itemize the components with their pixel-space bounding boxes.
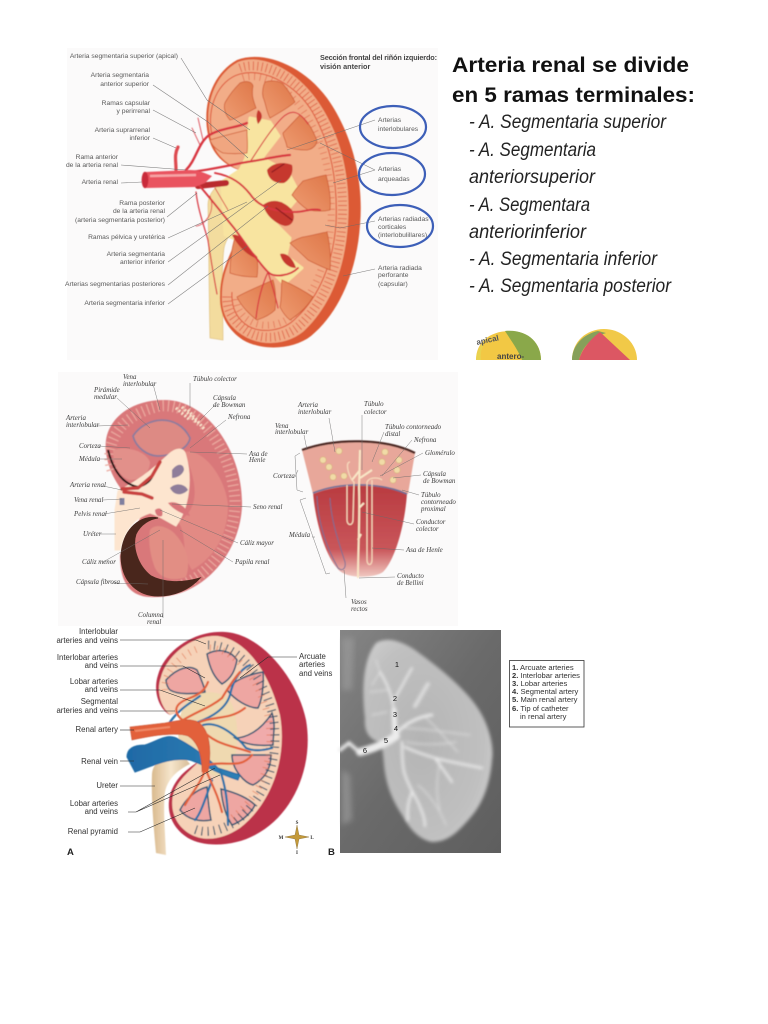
icon: compass rose <box>279 821 314 856</box>
labels: nephron wedge: Túbulo <box>421 492 441 499</box>
icon: compass rose: S <box>296 821 299 826</box>
labels: kidney section: Nefrona <box>227 414 251 421</box>
labels: right callouts: Arteria radiada <box>378 265 422 272</box>
panel: frontal section of left kidney, segmental arteries <box>65 48 438 360</box>
renal sinus and pelvis <box>115 449 189 550</box>
capsule band <box>302 441 415 453</box>
labels: and veins <box>85 685 118 694</box>
labels: kidney section: Asa de <box>248 451 268 458</box>
artery lumen <box>142 172 148 188</box>
labels: left callouts: de la arteria renal <box>66 162 119 169</box>
labels: nephron wedge: colector <box>416 526 439 533</box>
icon: compass rose: I <box>296 851 298 856</box>
labels: Ureter <box>96 781 118 790</box>
x-ray background <box>340 630 501 853</box>
labels: Lobar arteries <box>70 799 118 808</box>
labels: nephron wedge: Túbulo <box>364 401 384 408</box>
leader lines <box>96 383 423 618</box>
labels: left callouts: anterior superior <box>100 81 150 88</box>
vessel numbers: 3 <box>393 710 397 719</box>
renal pyramids <box>210 81 330 320</box>
icon: compass rose: L <box>310 836 314 841</box>
vessel numbers: 1 <box>395 660 399 669</box>
labels: nephron wedge: proximal <box>420 506 446 513</box>
labels: kidney section: Túbulo colector <box>193 376 237 383</box>
heading: en 5 ramas terminales: <box>452 84 695 107</box>
vessel numbers: 2 <box>393 694 397 703</box>
vessel numbers <box>363 660 399 755</box>
collecting duct <box>352 450 372 578</box>
labels: kidney section: Seno renal <box>253 504 282 511</box>
labels: kidney section: Corteza <box>79 443 101 450</box>
radial interlobular vessels <box>227 66 343 337</box>
labels: kidney section: Médula <box>78 456 101 463</box>
legend box <box>510 660 584 727</box>
renal vessels <box>122 462 160 498</box>
labels: kidney section: Vena renal <box>74 497 103 504</box>
labels: nephron wedge: Nefrona <box>413 437 437 444</box>
labels <box>56 627 332 836</box>
artery highlight <box>150 175 196 176</box>
labels: kidney section: Vena <box>123 374 137 381</box>
labels: and veins <box>85 807 118 816</box>
labels: nephron wedge: Cápsula <box>423 471 447 478</box>
section heading: Sección frontal del riñón izquierdo: <box>320 53 437 62</box>
cortical arteries <box>165 648 270 818</box>
bottom medulla <box>149 526 188 579</box>
labels: arteries and veins <box>56 636 118 645</box>
section heading <box>320 53 437 71</box>
labels: nephron wedge: rectos <box>351 606 368 613</box>
renal sinus <box>178 692 237 776</box>
labels: kidney section: Arteria <box>65 415 86 422</box>
labels: and veins <box>85 661 118 670</box>
panel: labeled kidney vasculature (A) <box>56 627 335 858</box>
labels: kidney section: Cáliz mayor <box>240 540 274 547</box>
labels: Interlobular <box>79 627 118 636</box>
capsule <box>206 57 361 347</box>
labels: nephron wedge: Conductor <box>416 519 446 526</box>
legend text: 1. Arcuate arteries <box>512 663 574 672</box>
spine shadow <box>342 638 354 825</box>
legend text: 2. Interlobar arteries <box>512 671 580 680</box>
panel: kidney section with nephron detail <box>58 372 458 626</box>
vein branches <box>170 665 272 825</box>
legend text: 4. Segmental artery <box>512 687 578 696</box>
labels: nephron wedge: Vena <box>275 423 289 430</box>
labels: left callouts: y perirrenal <box>117 108 151 115</box>
labels: right callouts: corticales <box>378 224 407 231</box>
labels: left callouts: inferior <box>130 135 151 142</box>
cortex <box>159 636 282 839</box>
labels: nephron wedge: Arteria <box>297 402 318 409</box>
branch list <box>469 112 672 297</box>
labels: arteries <box>299 660 325 669</box>
labels: kidney section: Cáliz menor <box>82 559 116 566</box>
glomeruli <box>320 448 402 483</box>
labels: nephron wedge: de Bowman <box>423 478 456 485</box>
labels: Segmental <box>81 697 118 706</box>
ball label: antero- <box>497 352 524 361</box>
cortical columns <box>110 406 235 590</box>
kidney cross section <box>106 400 242 597</box>
labels: nephron wedge: Vasos <box>351 599 367 606</box>
labels: left callouts: Rama posterior <box>119 200 166 207</box>
upper medulla lobe <box>133 420 190 456</box>
labels: left callouts: anterior inferior <box>120 259 166 266</box>
branch list: anteriorsuperior <box>469 167 596 188</box>
labels: Renal pyramid <box>68 827 118 836</box>
labels: right callouts: (interlobulillares) <box>378 232 427 239</box>
labels: Lobar arteries <box>70 677 118 686</box>
labels: kidney section: Pelvis renal <box>73 511 107 518</box>
renal vein <box>127 737 240 780</box>
artery branches <box>176 672 252 812</box>
branch list: - A. Segmentaria <box>469 140 596 161</box>
labels: nephron wedge: Glomérulo <box>425 450 455 457</box>
medulla <box>313 485 407 577</box>
kidney illustration <box>127 632 308 855</box>
panel background <box>58 372 458 626</box>
segment ball: anterior view <box>476 331 541 361</box>
cortex <box>302 441 415 494</box>
labels: left callouts: Rama anterior <box>76 154 119 161</box>
leader lines <box>120 640 297 832</box>
collecting tubule dots <box>176 407 205 430</box>
minor calyces <box>232 110 296 268</box>
renal pyramids <box>166 651 274 825</box>
labels: left callouts: Arteria segmentaria inferior <box>84 300 166 307</box>
main renal artery <box>146 170 212 188</box>
labels: nephron wedge: Conducto <box>397 573 424 580</box>
labels: left callouts: Arteria suprarrenal <box>95 127 151 134</box>
ureter <box>208 182 238 340</box>
renal calyces in sinus <box>170 465 188 494</box>
kidney illustration <box>142 57 361 347</box>
right medulla <box>178 452 228 570</box>
vessel numbers: 4 <box>394 724 398 733</box>
labels: right callouts <box>378 117 429 288</box>
legend text: in renal artery <box>520 712 567 721</box>
labels: kidney section: Pirámide <box>93 387 120 394</box>
section heading: visión anterior <box>320 62 370 71</box>
fibrous capsule crescent <box>121 517 200 596</box>
legend: angiogram key <box>510 660 584 727</box>
leader lines <box>121 58 375 304</box>
labels: kidney section: de Bowman <box>213 402 246 409</box>
legend text <box>512 663 580 721</box>
labels: kidney section: Columna <box>138 612 164 619</box>
labels: right callouts: perforante <box>378 272 409 279</box>
branch list: - A. Segmentara <box>469 195 590 216</box>
labels: right callouts: Arterias radiadas <box>378 216 429 223</box>
vasa recta <box>317 496 345 570</box>
branch list: - A. Segmentaria posterior <box>469 276 672 297</box>
kidney silhouette <box>363 640 493 842</box>
segment ball: posterior view <box>572 329 637 360</box>
figure letter A: A <box>67 847 74 858</box>
labels: right callouts: Arterias <box>378 166 402 173</box>
labels: left callouts <box>65 53 178 307</box>
ball label: apical <box>476 333 500 347</box>
labels: arteries and veins <box>56 706 118 715</box>
labels: left callouts: de la arteria renal <box>113 208 166 215</box>
labels: right callouts: (capsular) <box>378 281 408 288</box>
renal artery tree <box>340 660 482 826</box>
branch list: anteriorinferior <box>469 222 587 243</box>
labels: Renal vein <box>81 757 118 766</box>
renal artery and branches <box>176 112 320 318</box>
labels: nephron wedge: Corteza <box>273 473 295 480</box>
panel background <box>67 48 438 360</box>
vessel numbers: 6 <box>363 746 367 755</box>
heading: Arteria renal se divide <box>452 54 689 77</box>
upper lobe shadow <box>108 450 153 487</box>
labels: left callouts: Ramas pélvica y uretérica <box>88 234 165 241</box>
corticomedullary boundary <box>313 485 407 494</box>
labels: nephron wedge: distal <box>385 431 400 438</box>
icon: compass rose: M <box>279 836 284 841</box>
cortex <box>208 60 349 343</box>
labels: kidney section: medular <box>94 394 117 401</box>
ureter <box>152 752 190 855</box>
legend text: 5. Main renal artery <box>512 695 578 704</box>
labels: kidney section <box>65 374 282 626</box>
labels: nephron wedge: Túbulo contorneado <box>385 424 442 431</box>
left medulla lobe <box>113 448 150 480</box>
branch list: - A. Segmentaria superior <box>469 112 667 133</box>
heading <box>452 54 695 107</box>
kidney body <box>106 400 242 597</box>
renal sinus <box>222 118 302 284</box>
labels: and veins <box>299 669 332 678</box>
labels: kidney section: Uréter <box>83 531 102 538</box>
labels: Arcuate <box>299 652 326 661</box>
panel: list of terminal branches <box>452 54 695 361</box>
cortical vessels <box>192 645 275 831</box>
labels: Renal artery <box>76 725 118 734</box>
labels: right callouts: arqueadas <box>378 176 410 183</box>
renal artery <box>130 720 210 772</box>
labels: right callouts: interlobulares <box>378 126 419 133</box>
labels: left callouts: Arterias segmentarias posteriores <box>65 281 166 288</box>
labels: left callouts: (arteria segmentaria posterior) <box>75 217 165 224</box>
legend text: 6. Tip of catheter <box>512 704 569 713</box>
figure letter B: B <box>328 847 335 858</box>
labels: kidney section: Henle <box>248 457 265 464</box>
labels: kidney section: Cápsula <box>213 395 237 402</box>
panel: renal angiogram (B) <box>340 630 501 853</box>
labels: Interlobar arteries <box>57 653 118 662</box>
labels: kidney section: interlobular <box>123 381 157 388</box>
labels: kidney section: Cápsula fibrosa <box>76 579 121 586</box>
labels: kidney section: renal <box>147 619 161 626</box>
vessel numbers: 5 <box>384 736 388 745</box>
branch list: - A. Segmentaria inferior <box>469 249 658 270</box>
inner radial vessels <box>236 77 331 325</box>
labels: nephron wedge: Asa de Henle <box>405 547 443 554</box>
labels: nephron wedge: de Bellini <box>397 580 424 587</box>
labels: nephron wedge: Médula <box>288 532 311 539</box>
outer capsule <box>156 632 308 844</box>
labels: kidney section: Papila renal <box>234 559 269 566</box>
nephron wedge <box>302 441 415 578</box>
labels: nephron wedge <box>273 401 456 613</box>
labels: right callouts: Arterias <box>378 117 402 124</box>
labels: left callouts: Ramas capsular <box>102 100 151 107</box>
labels: nephron wedge: interlobular <box>298 409 332 416</box>
labels: left callouts: Arteria renal <box>82 179 119 186</box>
labels: left callouts: Arteria segmentaria <box>91 72 149 79</box>
labels: nephron wedge: contorneado <box>421 499 456 506</box>
artery highlight <box>135 727 170 731</box>
labels: kidney section: Arteria renal <box>69 482 106 489</box>
blue highlight ellipses <box>359 106 433 247</box>
labels: kidney section: interlobular <box>66 422 100 429</box>
labels: nephron wedge: interlobular <box>275 429 309 436</box>
labels: nephron wedge: colector <box>364 409 387 416</box>
legend text: 3. Lobar arteries <box>512 679 568 688</box>
labels: left callouts: Arteria segmentaria <box>107 251 165 258</box>
arcuate arteries <box>210 73 336 330</box>
labels: left callouts: Arteria segmentaria superior (apical) <box>70 53 178 60</box>
nephron loops <box>347 462 382 564</box>
